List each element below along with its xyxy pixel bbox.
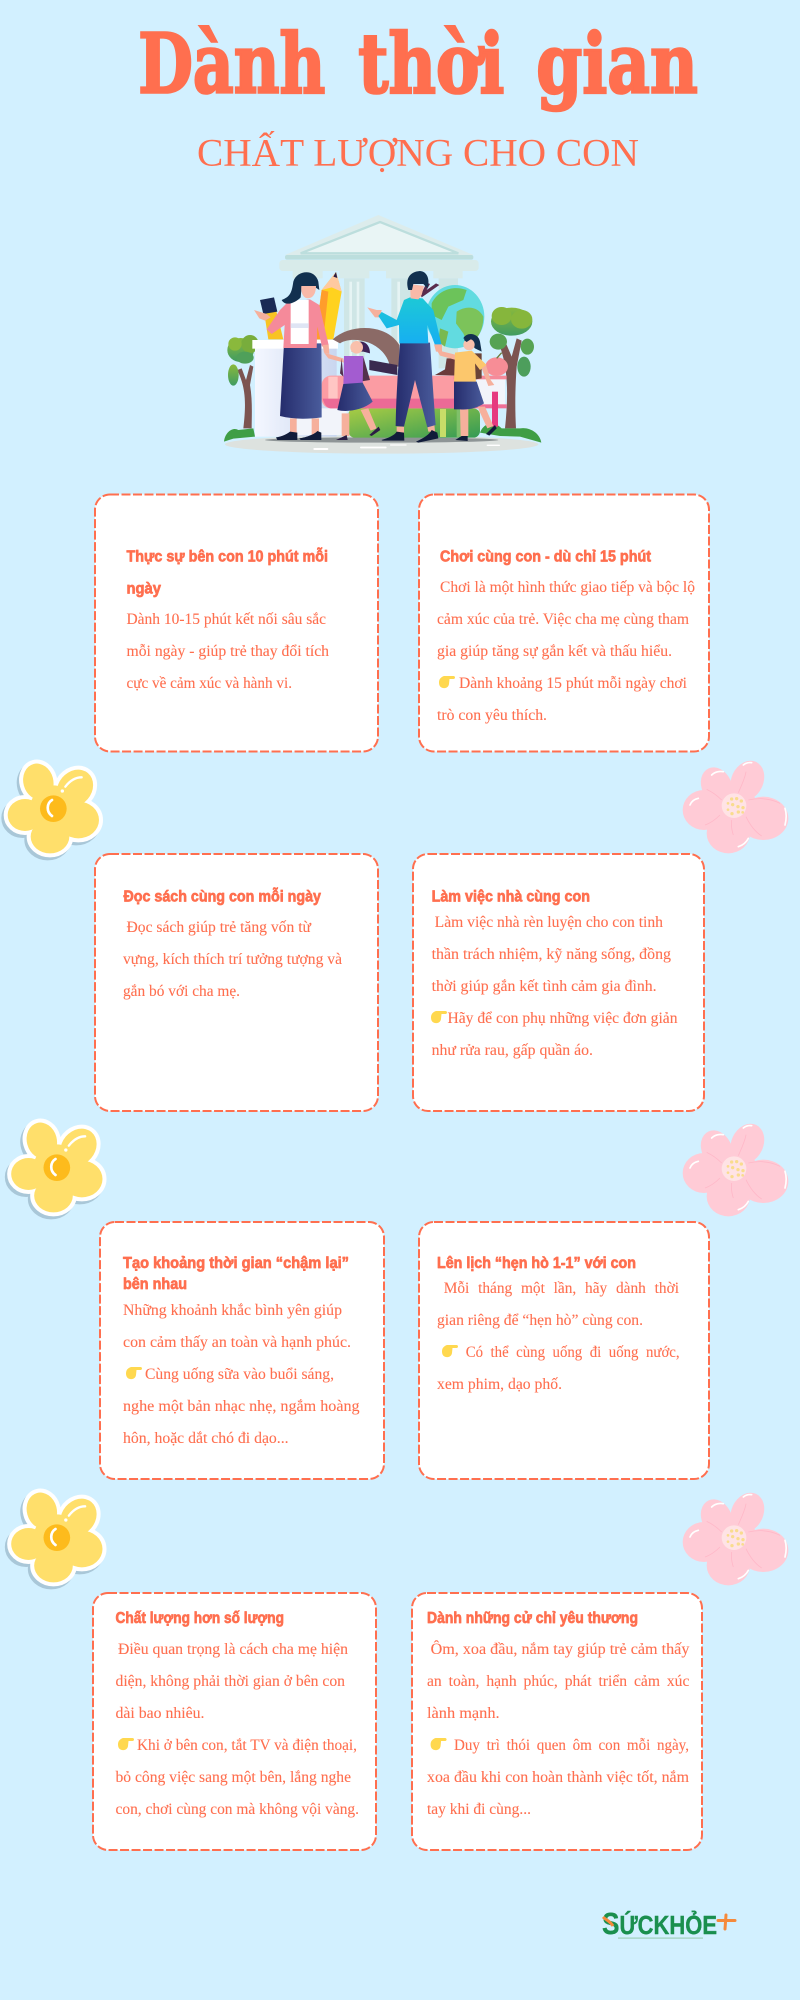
text block: bỏ công việc sang một bên, lắng nghe	[116, 1769, 351, 1786]
text block: gắn bó với cha mẹ.	[123, 983, 240, 1000]
text block: thời giúp gắn kết tình cảm gia đình.	[432, 978, 657, 995]
heading: Tạo khoảng thời gian “chậm lại”	[123, 1255, 349, 1272]
heading: Chơi cùng con - dù chỉ 15 phút	[440, 549, 652, 566]
flower: yellow middle left	[9, 1119, 104, 1215]
flower: pink middle right	[683, 1118, 788, 1216]
text block: dài bao nhiêu.	[116, 1705, 204, 1722]
text block: trò con yêu thích.	[437, 707, 547, 724]
text block: xoa đầu khi con hoàn thành việc tốt, nắm	[427, 1769, 689, 1786]
text block: Dành khoảng 15 phút mỗi ngày chơi	[459, 675, 688, 692]
heading	[123, 1255, 349, 1293]
heading: Làm việc nhà cùng con	[432, 889, 590, 906]
ground	[225, 435, 538, 454]
flower: pink top right	[683, 755, 788, 853]
text block: Duy trì thói quen ôm con mỗi ngày,	[454, 1737, 689, 1754]
text block	[432, 914, 678, 1059]
text block: Cùng uống sữa vào buổi sáng,	[145, 1366, 334, 1383]
panel: Dành những cử chỉ yêu thương	[412, 1593, 702, 1850]
boy	[437, 334, 497, 441]
text block: thần trách nhiệm, kỹ năng sống, đồng	[432, 946, 671, 963]
panel: Đọc sách cùng con mỗi ngày	[95, 854, 378, 1111]
text block: Những khoảnh khắc bình yên giúp	[123, 1302, 342, 1319]
panel: Thực sự bên con 10 phút mỗi ngày	[95, 494, 378, 752]
text block: tay khi đi cùng...	[427, 1801, 531, 1818]
heading: Đọc sách cùng con mỗi ngày	[124, 887, 321, 906]
text block: gia giúp tăng sự gắn kết và thấu hiểu.	[437, 643, 672, 660]
text block: cảm xúc của trẻ. Việc cha mẹ cùng tham	[437, 611, 689, 628]
text block: nghe một bản nhạc nhẹ, ngắm hoàng	[123, 1398, 360, 1415]
logo: Sức Khỏe+: SỨCKHỎE	[602, 1906, 717, 1941]
illustration: family in front of a school building	[224, 215, 541, 454]
text block: Đọc sách giúp trẻ tăng vốn từ	[126, 919, 312, 936]
text block: Điều quan trọng là cách cha mẹ hiện	[118, 1641, 348, 1658]
pencil	[315, 272, 342, 339]
heading: ngày	[126, 581, 161, 598]
text block: Chơi là một hình thức giao tiếp và bộc lộ	[440, 579, 695, 596]
girl	[324, 341, 380, 440]
globe	[421, 283, 484, 376]
text block: vựng, kích thích trí tưởng tượng và	[123, 951, 342, 968]
paint brush	[260, 297, 283, 339]
text block: con, chơi cùng con mà không vội vàng.	[116, 1801, 359, 1818]
panel: Làm việc nhà cùng con	[413, 854, 704, 1111]
text block: Dành 10-15 phút kết nối sâu sắc	[126, 611, 326, 628]
text block: mỗi ngày - giúp trẻ thay đổi tích	[126, 643, 329, 660]
icon: pointing hand	[118, 1738, 134, 1750]
text block	[437, 1280, 680, 1393]
text block	[123, 919, 342, 1000]
heading	[126, 547, 328, 598]
icon: pointing hand	[431, 1738, 447, 1750]
text block: gian riêng để “hẹn hò” cùng con.	[437, 1312, 643, 1329]
text block: Khi ở bên con, tắt TV và điện thoại,	[137, 1737, 357, 1754]
flower: yellow top left	[5, 760, 101, 856]
heading: Chất lượng hơn số lượng	[116, 1610, 284, 1627]
text block: hôn, hoặc dắt chó đi dạo...	[123, 1430, 289, 1447]
text block: cực về cảm xúc và hành vi.	[126, 675, 292, 692]
heading: Dành những cử chỉ yêu thương	[427, 1610, 638, 1627]
heading: Thực sự bên con 10 phút mỗi	[126, 547, 328, 566]
title: Dành	[138, 17, 325, 113]
text block	[123, 1302, 360, 1447]
title: thời	[358, 17, 504, 113]
heading: Lên lịch “hẹn hò 1-1” với con	[437, 1255, 636, 1272]
subtitle: CHẤT LƯỢNG CHO CON	[197, 130, 639, 175]
text block: an toàn, hạnh phúc, phát triển cảm xúc	[427, 1673, 690, 1690]
icon: pointing hand	[442, 1345, 458, 1357]
text block: diện, không phải thời gian ở bên con	[116, 1673, 345, 1690]
text block: Mỗi tháng một lần, hãy dành thời	[444, 1280, 680, 1297]
text block: như rửa rau, gấp quần áo.	[432, 1042, 593, 1059]
title	[138, 17, 698, 113]
title: gian	[536, 17, 698, 113]
mother	[254, 272, 329, 440]
text block: xem phim, dạo phố.	[437, 1376, 562, 1393]
text block: con cảm thấy an toàn và hạnh phúc.	[123, 1334, 351, 1351]
stack of books	[297, 376, 507, 438]
icon: pointing hand	[431, 1011, 447, 1023]
father	[367, 271, 442, 443]
left tree	[224, 335, 259, 442]
icon: pointing hand	[439, 676, 455, 688]
white block pedestal	[252, 340, 338, 437]
text block	[126, 611, 329, 692]
text block	[116, 1641, 359, 1818]
panel: Lên lịch hẹn hò 1-1 với con	[419, 1222, 709, 1479]
text block: lành mạnh.	[427, 1705, 500, 1722]
text block: Có thể cùng uống đi uống nước,	[466, 1344, 680, 1361]
right tree	[480, 307, 541, 443]
text block	[437, 579, 695, 724]
flower: yellow bottom left	[9, 1489, 104, 1585]
flower: pink bottom right	[683, 1487, 788, 1585]
text block: Hãy để con phụ những việc đơn giản	[448, 1010, 678, 1027]
panel: Tạo khoảng thời gian chậm lại bên nhau	[100, 1222, 384, 1479]
text block	[427, 1641, 690, 1818]
temple building	[279, 215, 479, 375]
heading: bên nhau	[123, 1276, 187, 1293]
protractor	[333, 328, 399, 375]
apple	[485, 353, 508, 376]
icon: pointing hand	[126, 1367, 142, 1379]
panel: Chất lượng hơn số lượng	[93, 1593, 376, 1850]
text block: Làm việc nhà rèn luyện cho con tinh	[435, 914, 663, 931]
text block: Ôm, xoa đầu, nắm tay giúp trẻ cảm thấy	[431, 1641, 690, 1658]
panel: Chơi cùng con - dù chỉ 15 phút	[419, 494, 709, 752]
